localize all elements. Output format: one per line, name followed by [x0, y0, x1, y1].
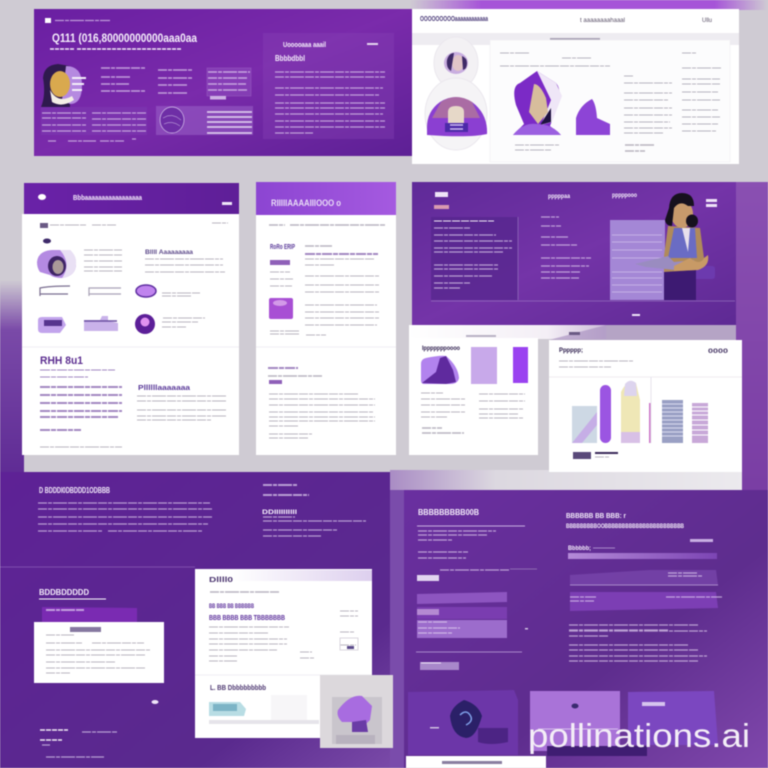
right bars	[568, 546, 722, 611]
card headings	[209, 592, 285, 622]
light page: pppppooo	[612, 193, 637, 199]
lower article	[268, 368, 375, 438]
top right article	[262, 485, 366, 536]
card body	[209, 611, 358, 661]
left column: RoRo ERIP	[270, 244, 295, 251]
chart heading: Pppppp;	[559, 347, 583, 354]
header labels: t aaaaaaaahaaal	[580, 17, 626, 24]
section heading: BDDBDDDDD	[39, 588, 89, 597]
dark text box	[431, 192, 735, 301]
camera icon	[37, 238, 76, 278]
panel: bottom right purple	[404, 490, 768, 768]
header labels	[420, 16, 712, 24]
lower table	[41, 107, 147, 135]
lower left article: RHH 8u1	[40, 355, 83, 367]
globe chart card	[156, 106, 253, 135]
card heading: Ipppppppoooo	[422, 345, 460, 352]
divider	[0, 566, 195, 568]
side article: Uooooaaa aaail	[283, 42, 326, 49]
watermark: pollinations.ai	[528, 717, 750, 754]
header labels: Ullu	[702, 18, 712, 24]
bottom strip	[406, 746, 647, 768]
right column text	[305, 246, 379, 335]
side article	[263, 33, 394, 139]
section heading	[39, 588, 106, 599]
lower right article	[137, 385, 226, 420]
card text	[421, 393, 525, 433]
side article: Bbbbdbbl	[275, 54, 305, 63]
chart heading	[549, 347, 742, 377]
sub header	[40, 223, 228, 228]
device card	[408, 690, 518, 755]
small purple shape	[576, 99, 610, 135]
light panel	[471, 347, 497, 384]
header	[24, 183, 239, 214]
inner page	[490, 40, 730, 162]
purple dome oval	[425, 78, 487, 150]
panel: white article card	[195, 569, 372, 738]
lilac card	[530, 691, 620, 751]
light page	[610, 193, 665, 300]
card title: Dllll0	[209, 577, 233, 584]
middle column	[541, 194, 591, 278]
feature text	[84, 249, 225, 272]
feature text: Bllll Aaaaaaaaa	[145, 249, 193, 256]
left heading	[417, 508, 525, 540]
left notes	[417, 552, 537, 581]
header: Bbbaaaaaaaaaaaaaaaaa	[73, 195, 142, 202]
panel: dark purple with presenter	[412, 182, 736, 325]
right heading: BBBBBBBBBOOBBBBBBBBBBBBBBBBBBBBBBB	[566, 523, 684, 530]
middle column: pppppaa	[548, 194, 571, 200]
top article: D BDDDI0DBDDD1ODBBB	[39, 486, 110, 495]
purple panel	[513, 347, 528, 383]
right heading: BBBBBB BB BBB: r	[566, 513, 626, 520]
top article	[38, 486, 212, 531]
header mark	[45, 18, 110, 23]
article text	[500, 53, 722, 151]
panel: product sheet	[22, 183, 239, 455]
card title	[209, 570, 372, 584]
panel: narrow sheet	[256, 182, 396, 455]
panel: white band and shapes card	[409, 325, 736, 455]
card section: L. BB Dbbbbbbbbb	[210, 685, 266, 692]
gem shape	[513, 71, 562, 135]
right bars: Bbbbbb;	[568, 546, 591, 552]
figure: presenter	[635, 193, 715, 300]
header labels: OOOOOOOOOaaaaaaaaaaaa	[420, 16, 488, 23]
small tick	[152, 700, 158, 704]
bottom notes	[40, 730, 117, 757]
lower right article: Pllllllaaaaaaa	[138, 385, 190, 392]
right heading	[566, 513, 713, 542]
right body	[569, 625, 707, 661]
panel: top left purple	[34, 9, 412, 156]
divider	[256, 346, 396, 348]
chart: bars	[572, 377, 708, 443]
footer text	[48, 139, 136, 141]
violet card	[628, 691, 718, 745]
portrait oval	[434, 37, 478, 89]
top right label	[706, 199, 717, 207]
panel: top right white	[412, 9, 739, 164]
purple band	[42, 607, 137, 622]
title underline	[50, 48, 182, 50]
icon: purple bag	[269, 298, 293, 319]
photo: shell portrait	[41, 64, 86, 107]
panel: bottom left purple	[0, 472, 404, 768]
grey band	[412, 33, 739, 45]
divider	[22, 346, 239, 348]
footer tick	[632, 314, 640, 316]
image card: purple mushroom	[320, 675, 393, 748]
left heading: BBBBBBBBB00B	[418, 508, 479, 517]
card headings: BBB BBBB BBB TBBBBBBB	[209, 613, 285, 622]
teal blob	[209, 695, 319, 724]
card heading	[422, 332, 580, 352]
left column	[270, 244, 295, 286]
row two icons	[40, 285, 200, 297]
header	[256, 182, 396, 215]
sub header	[269, 224, 385, 226]
left bars	[416, 592, 522, 670]
card headings: BB BBB BB BBBBBB	[209, 603, 254, 610]
left caption	[270, 331, 300, 334]
chart legend	[573, 452, 618, 459]
lower left article	[40, 355, 122, 447]
chart heading: 0000	[708, 349, 729, 355]
row three icons	[38, 314, 205, 334]
purple blob	[421, 356, 459, 384]
top right article: DDIIIIIIIIII	[262, 509, 297, 516]
white card	[34, 622, 164, 683]
header: RIIIIIAAAAIIIOOO o	[271, 198, 341, 208]
small tick	[525, 628, 528, 630]
panel: chart card	[549, 340, 742, 472]
title: Q111 (016,80000000000aaa0aa	[52, 31, 197, 45]
text columns	[101, 68, 251, 100]
